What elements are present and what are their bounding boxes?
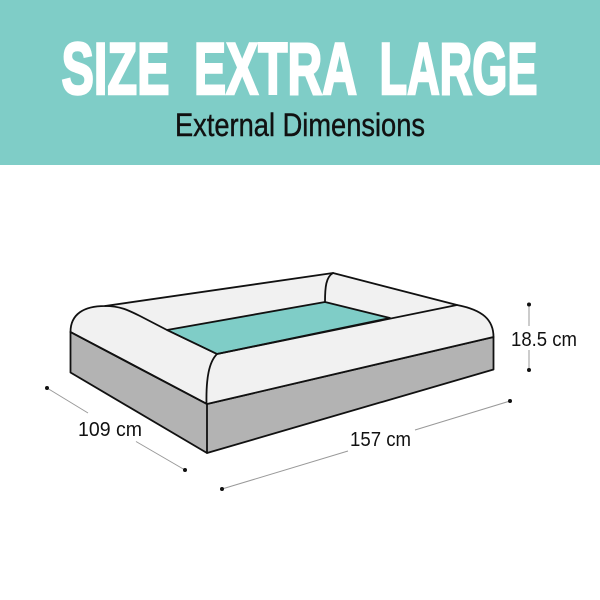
title [62, 29, 538, 110]
dimension: 157 cm: 157 cm [350, 428, 411, 451]
bolster lines [70, 273, 457, 453]
header banner [0, 0, 600, 165]
bed base [70, 332, 494, 453]
dimension: 18.5 cm: 18.5 cm [511, 328, 577, 351]
title: SIZE [62, 29, 170, 110]
title: EXTRA [194, 29, 357, 110]
teal sleeping area [167, 302, 390, 354]
dimension: 109 cm: 109 cm [78, 418, 142, 441]
dimension: 18.5 cm [511, 302, 577, 372]
dimension: 157 cm [220, 399, 512, 491]
dimension: 109 cm [45, 386, 187, 472]
bed cushion [70, 273, 494, 404]
subtitle: External Dimensions [175, 107, 425, 143]
bed illustration [70, 273, 494, 453]
